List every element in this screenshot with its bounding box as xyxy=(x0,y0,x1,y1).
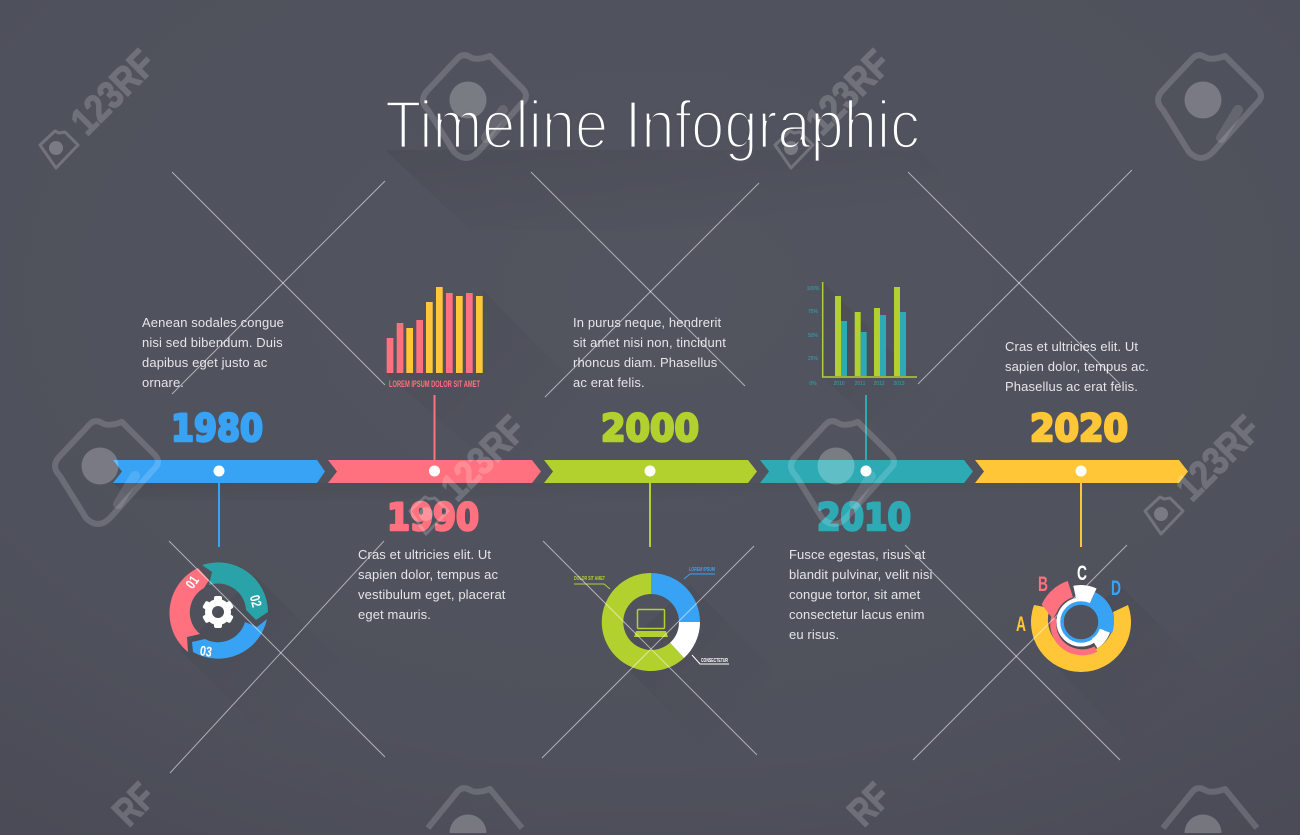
text block: 2010: consectetur lacus enim xyxy=(789,607,925,622)
watermarks: RF xyxy=(840,775,899,835)
chart: grouped bars 2010: 2013 xyxy=(893,381,905,387)
icon: gear xyxy=(202,596,234,628)
chart: donut 2000: LOREM IPSUM xyxy=(689,567,715,573)
text block: 1990: Cras et ultricies elit. Ut xyxy=(358,547,491,562)
year: 1980: 1980 xyxy=(171,407,263,450)
chart: donut 2000: CONSECTETUR xyxy=(701,658,728,664)
text block: 2020: Cras et ultricies elit. Ut xyxy=(1005,339,1138,354)
chart: multi-ring 2020: A xyxy=(1016,613,1026,636)
long shadows xyxy=(113,150,1215,755)
text block: 2000: In purus neque, hendrerit xyxy=(573,315,722,330)
text block: 2020 xyxy=(1005,339,1149,394)
chart: cycle diagram 1980: 02 xyxy=(247,593,265,609)
chart: cycle diagram 1980: 01 xyxy=(182,572,202,592)
watermarks: RF xyxy=(105,775,164,835)
year: 2020: 2020 xyxy=(1030,407,1128,450)
text block: 1980: dapibus eget justo ac xyxy=(142,355,268,370)
watermarks: 123RF xyxy=(433,408,534,509)
text block: 1980: Aenean sodales congue xyxy=(142,315,284,330)
chart: grouped bars 2010: 75% xyxy=(808,309,819,315)
chart: grouped bars 2010: 50% xyxy=(808,333,819,339)
chart: bars 1990 xyxy=(387,287,483,389)
x-shaped watermark lines xyxy=(169,170,1132,773)
chart: donut 2000 xyxy=(574,567,729,671)
chart: grouped bars 2010: 0% xyxy=(809,381,817,387)
text block: 2000 xyxy=(573,315,726,390)
text block: 1990: vestibulum eget, placerat xyxy=(358,587,506,602)
text block: 1980: ornare. xyxy=(142,375,184,390)
year: 2000: 2000 xyxy=(601,407,699,450)
chart: grouped bars 2010: 25% xyxy=(808,356,819,362)
text block: 1990 xyxy=(358,547,506,622)
title: Timeline Infographic xyxy=(385,87,920,163)
text block: 2010: congue tortor, sit amet xyxy=(789,587,921,602)
text block: 1980: nisi sed bibendum. Duis xyxy=(142,335,283,350)
year: 2010: 2010 xyxy=(817,496,911,539)
year: 1990: 1990 xyxy=(387,496,479,539)
text block: 2000: sit amet nisi non, tincidunt xyxy=(573,335,726,350)
arrow: 2010 segment xyxy=(760,460,973,483)
text block: 2000: ac erat felis. xyxy=(573,375,645,390)
chart: grouped bars 2010: 2012 xyxy=(873,381,885,387)
arrow: 2020 segment xyxy=(975,460,1188,483)
chart: cycle diagram 1980 xyxy=(169,562,268,660)
text block: 2000: rhoncus diam. Phasellus xyxy=(573,355,718,370)
chart: multi-ring 2020 xyxy=(1016,562,1131,672)
chart: multi-ring 2020: D xyxy=(1111,577,1121,600)
connector stems xyxy=(219,395,1081,547)
watermarks: 123RF xyxy=(63,42,164,143)
chart: bars 1990: LOREM IPSUM DOLOR SIT AMET xyxy=(389,379,480,389)
text block: 2010: blandit pulvinar, velit nisi xyxy=(789,567,933,582)
text block: 1990: eget mauris. xyxy=(358,607,431,622)
text block: 1990: sapien dolor, tempus ac xyxy=(358,567,498,582)
arrow: 2000 segment xyxy=(544,460,757,483)
chart: grouped bars 2010 xyxy=(807,282,917,387)
text block: 2010 xyxy=(789,547,933,642)
text block: 2010: eu risus. xyxy=(789,627,839,642)
arrow: 1980 segment xyxy=(113,460,325,483)
watermarks: 123RF xyxy=(798,42,899,143)
text block: 2010: Fusce egestas, risus at xyxy=(789,547,926,562)
chart: multi-ring 2020: B xyxy=(1038,573,1048,596)
chart: donut 2000: DOLOR SIT AMET xyxy=(574,576,605,582)
timeline arrows xyxy=(113,460,1188,483)
text block: 2020: Phasellus ac erat felis. xyxy=(1005,379,1138,394)
text block: 2020: sapien dolor, tempus ac. xyxy=(1005,359,1149,374)
text block: 1980 xyxy=(142,315,284,390)
watermarks: 123RF xyxy=(1168,408,1269,509)
chart: cycle diagram 1980: 03 xyxy=(199,642,213,660)
chart: grouped bars 2010: 100% xyxy=(807,286,820,292)
timeline dots xyxy=(214,466,1086,476)
icon: laptop xyxy=(634,610,668,637)
chart: multi-ring 2020: C xyxy=(1077,562,1087,585)
chart: grouped bars 2010: 2011 xyxy=(855,381,866,387)
chart: grouped bars 2010: 2010 xyxy=(833,381,845,387)
arrow: 1990 segment xyxy=(328,460,541,483)
